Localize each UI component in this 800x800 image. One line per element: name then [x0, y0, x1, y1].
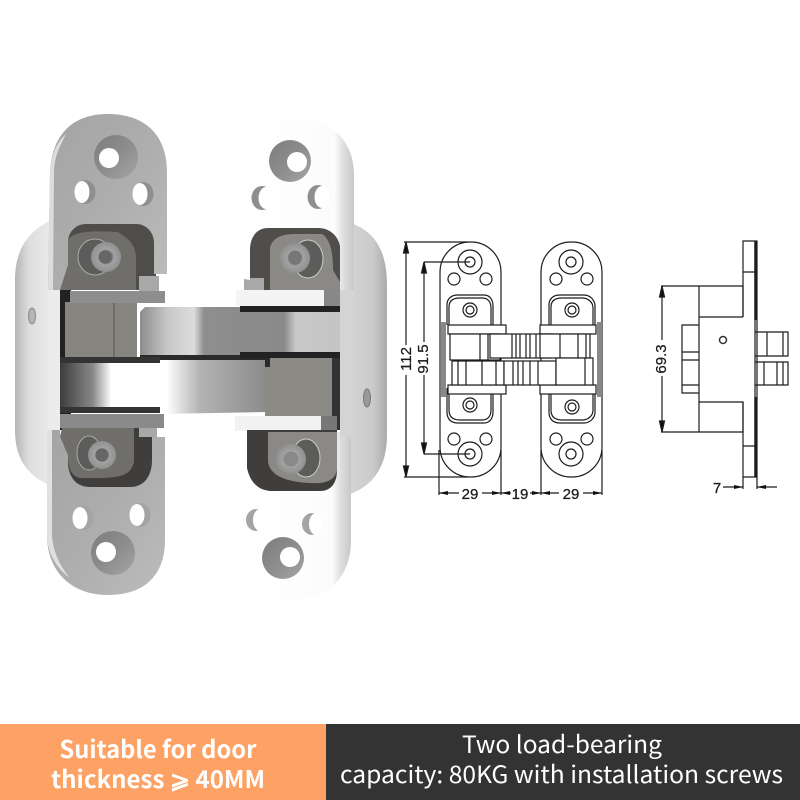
- right plate: [232, 118, 354, 600]
- right plate holes: [269, 140, 311, 182]
- right plate lower metal: [232, 432, 351, 600]
- mechanism outline: [441, 322, 602, 397]
- side plate: [743, 241, 757, 477]
- set screw left: [28, 308, 36, 324]
- right plate upper metal: [233, 118, 354, 290]
- dimension 112: [404, 242, 468, 477]
- left plate upper metal: [48, 114, 167, 290]
- bottom dimensions 29 19 29: 29: [563, 486, 579, 503]
- dimension 7: 7: [713, 480, 721, 497]
- door thickness text: thickness ⩾ 40MM: [51, 760, 265, 795]
- right window upper: [244, 226, 340, 290]
- bottom dimensions 29 19 29: 29: [462, 486, 478, 503]
- side body: [699, 286, 743, 432]
- door thickness text: Suitable for door: [60, 730, 257, 765]
- central mechanism: [59, 290, 341, 431]
- left plate holes: [94, 135, 138, 179]
- lower arm: [60, 360, 265, 414]
- bars: [70, 291, 165, 303]
- dimension text 112: 112: [398, 347, 415, 371]
- bottom dimensions 29 19 29: [439, 450, 602, 503]
- left door body: [15, 216, 62, 490]
- left plate bright edge: [48, 134, 66, 290]
- bottom dimensions 29 19 29: 19: [512, 486, 528, 503]
- door thickness text: [51, 730, 265, 795]
- upper left block: [65, 302, 137, 360]
- footer right panel: [326, 724, 800, 800]
- side front block: [755, 332, 788, 385]
- right door body: [340, 220, 387, 497]
- right plate outline: [541, 242, 602, 477]
- left window upper: [60, 220, 159, 291]
- dimension text 91.5: 91.5: [415, 344, 432, 374]
- dimension text 69.3: 69.3: [653, 344, 670, 374]
- left plate: [47, 114, 167, 595]
- dimension 69.3: [660, 286, 699, 432]
- lower right block: [265, 358, 332, 418]
- dimension 91.5: [422, 262, 470, 454]
- load capacity text: [340, 725, 783, 790]
- left window lower: [60, 428, 157, 489]
- side view technical drawing: [653, 241, 788, 497]
- front view technical drawing: [398, 242, 602, 503]
- dimension 7: [713, 477, 777, 497]
- left plate lower metal: [47, 430, 165, 595]
- footer left panel: [0, 724, 326, 800]
- left plate outline: [440, 242, 501, 477]
- load capacity text: Two load-bearing: [462, 725, 662, 760]
- load capacity text: capacity: 80KG with installation screws: [340, 755, 783, 790]
- set screw right: [364, 389, 370, 407]
- side body right edge: [754, 320, 756, 397]
- hinge product photo: [15, 114, 387, 600]
- side hole: [720, 336, 726, 344]
- upper arm: [140, 307, 340, 355]
- right window lower: [247, 430, 337, 492]
- side rear block: [682, 325, 699, 393]
